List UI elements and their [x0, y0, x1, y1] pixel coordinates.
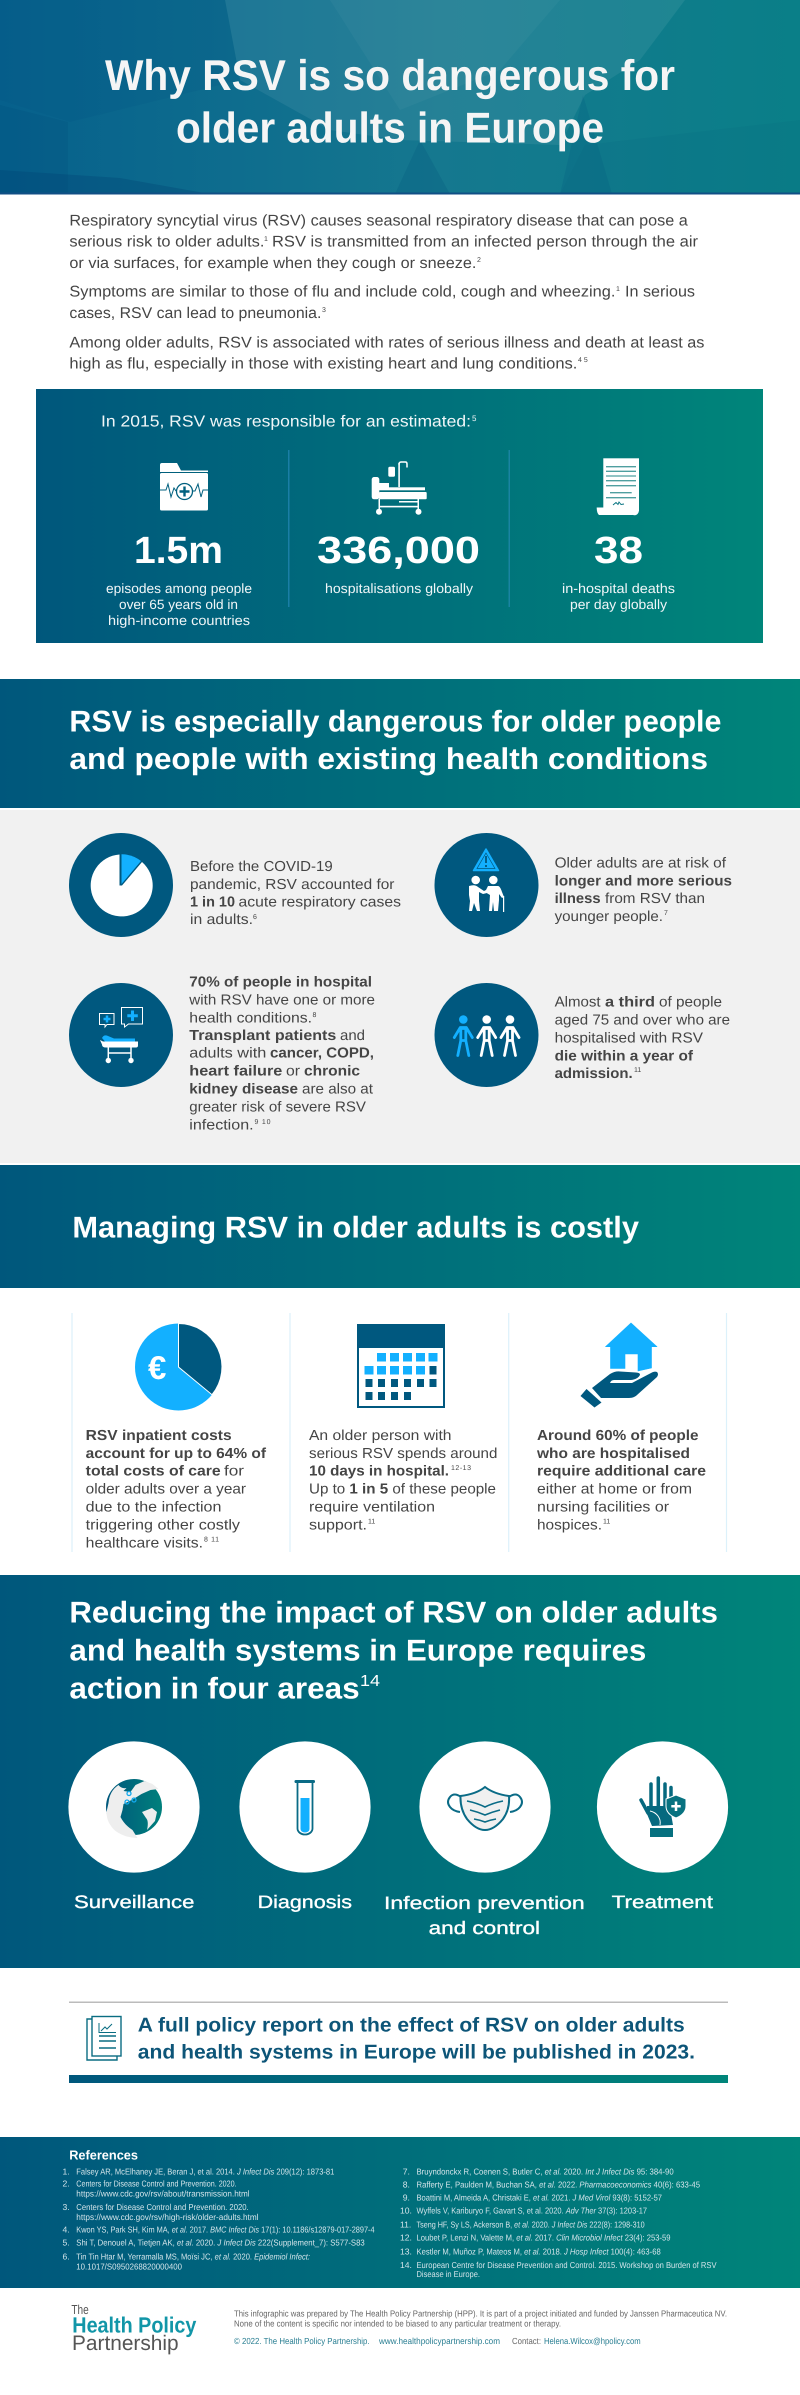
- statistic: 38 deaths: in-hospital deaths: [562, 581, 675, 596]
- text: additional care: nursing facilities or: [537, 1499, 669, 1515]
- fact: existing conditions: cancer, COPD,: [270, 1046, 374, 1062]
- references column one: 3.: [62, 2202, 70, 2212]
- icon: report document: [87, 2016, 121, 2060]
- intro text: serious risk to older adults.: [69, 234, 264, 251]
- action: surveillance label: Surveillance: [74, 1892, 194, 1912]
- references column two: Wyffels V, Kariburyo F, Gavart S, et al. 2020. Adv Ther 37(3): 1203-17: [416, 2206, 647, 2216]
- text: ten days in hospital: [309, 1428, 497, 1533]
- text: inpatient costs: [86, 1428, 266, 1551]
- references column one: Centers for Disease Control and Prevention. 2020.: [76, 2179, 237, 2189]
- fact: die within a year: die within a year of: [555, 1048, 693, 1064]
- fact: existing conditions: kidney disease: [189, 1081, 298, 1097]
- references column two: 7.: [403, 2166, 410, 2176]
- statistic: 38 deaths: 38: [594, 530, 643, 572]
- fact: one in ten: [190, 859, 401, 928]
- statistic: 1.5m episodes: [106, 530, 252, 628]
- references column one: Falsey AR, McElhaney JE, Beran J, et al. 2014. J Infect Dis 209(12): 1873-81: [76, 2166, 334, 2176]
- fact: existing conditions: heart failure: [189, 1064, 282, 1080]
- fact: existing conditions: Transplant patients: [189, 1028, 336, 1044]
- fact: longer illness: [555, 856, 732, 925]
- intro text: RSV is transmitted from an infected person through the air: [272, 234, 698, 251]
- intro text: or via surfaces, for example when they cough or sneeze.: [69, 255, 476, 272]
- icon: hand holding house: [580, 1323, 658, 1408]
- fact: existing conditions: or: [286, 1064, 300, 1080]
- text: additional care: hospices.: [537, 1517, 602, 1533]
- intro text: In serious: [625, 284, 695, 301]
- references column one: 2.: [62, 2179, 70, 2189]
- logo: Health Policy Partnership: [71, 2302, 197, 2355]
- text: additional care: who are hospitalised: [536, 1446, 690, 1462]
- intro text: 4 5: [578, 357, 588, 364]
- references column two: Rafferty E, Paulden M, Buchan SA, et al. 2022. Pharmacoeconomics 40(6): 633-45: [416, 2179, 700, 2189]
- fact: existing conditions: health conditions.: [189, 1010, 312, 1026]
- fact: existing conditions: are also at: [302, 1081, 373, 1097]
- intro text: cases, RSV can lead to pneumonia.: [69, 305, 321, 322]
- references column one: 10.1017/S0950268820000400: [76, 2261, 182, 2271]
- references column one: https://www.cdc.gov/rsv/about/transmission.html: [76, 2189, 250, 2199]
- fact: one in ten: acute respiratory cases: [238, 895, 401, 911]
- title: older adults in Europe: [176, 105, 604, 153]
- text: inpatient costs: older adults over a year: [86, 1482, 246, 1498]
- intro text: 2: [477, 257, 481, 264]
- footer disclosure: www.healthpolicypartnership.com: [378, 2336, 500, 2346]
- references column two: Disease in Europe.: [416, 2269, 480, 2279]
- panel: references: [0, 2137, 800, 2288]
- panel: section heading dangerous: RSV is especially dangerous for older people: [69, 706, 721, 739]
- fact: die within a year: aged 75 and over who are: [555, 1013, 730, 1029]
- panel: four action areas: [0, 1575, 800, 1968]
- text: inpatient costs: account for up to 64% of: [86, 1446, 266, 1462]
- icon: signed document: [597, 458, 639, 515]
- action: infection prevention label: [384, 1893, 585, 1938]
- text: inpatient costs: 8 11: [204, 1536, 219, 1544]
- action: infection prevention: [419, 1741, 551, 1873]
- references column two: 10.: [400, 2206, 412, 2216]
- fact: existing conditions: adults with: [189, 1046, 266, 1062]
- logo: Health Policy Partnership: Partnership: [72, 2332, 179, 2355]
- title: [105, 52, 675, 153]
- fact: die within a year: a third: [605, 995, 655, 1011]
- statistic: 336,000 hospitalisations: [317, 530, 480, 596]
- action: surveillance: [68, 1741, 200, 1873]
- references column one: Tin Tin Htar M, Yerramalla MS, Moïsi JC, et al. 2020. Epidemiol Infect:: [76, 2251, 311, 2261]
- icon: patient on stretcher: [69, 983, 173, 1087]
- text: additional care: Around 60% of people: [537, 1428, 698, 1444]
- text: inpatient costs: due to the infection: [86, 1499, 221, 1515]
- references column two: Kestler M, Muñoz P, Mateos M, et al. 2018. J Hosp Infect 100(4): 463-68: [416, 2246, 661, 2256]
- callout text: A full policy report on the effect of RSV on older adults: [138, 2015, 685, 2037]
- intro text: Among older adults, RSV is associated with rates of serious illness and death at least as: [69, 334, 705, 351]
- fact: existing conditions: chronic: [304, 1064, 360, 1080]
- footer disclosure: This infographic was prepared by The Health Policy Partnership (HPP). It is part of a project initiated and funded by Janssen Pharmaceutica NV.: [234, 2309, 727, 2319]
- text: additional care: [536, 1428, 706, 1533]
- fact: one in ten: 6: [253, 914, 257, 921]
- statistic: 1.5m episodes: high-income countries: [108, 613, 250, 628]
- fact: one in ten: 1 in 10: [190, 895, 235, 911]
- icon: three people: [434, 983, 538, 1087]
- fact: die within a year: of people: [659, 995, 722, 1011]
- fact: die within a year: Almost: [555, 995, 601, 1011]
- text: inpatient costs: triggering other costly: [86, 1517, 241, 1533]
- icon: euro pie chart: [135, 1324, 222, 1410]
- references column two: 14.: [400, 2260, 412, 2270]
- references heading: References: [69, 2147, 138, 2162]
- references column two: Tseng HF, Sy LS, Ackerson B, et al. 2020. J Infect Dis 222(8): 1298-310: [416, 2220, 645, 2230]
- panel: 2015 statistics: 5: [472, 414, 477, 423]
- panel: section heading costly: [0, 1165, 800, 1288]
- text: ten days in hospital: 10 days in hospital.: [309, 1464, 449, 1480]
- text: ten days in hospital: require ventilation: [309, 1499, 435, 1515]
- footer disclosure: Contact:: [512, 2336, 541, 2346]
- fact: longer illness: Older adults are at risk of: [555, 856, 727, 872]
- icon: calendar: [357, 1324, 445, 1407]
- panel: cost columns: [72, 1313, 726, 1552]
- logo: Health Policy Partnership: The: [71, 2302, 89, 2317]
- references column one: 4.: [62, 2225, 70, 2235]
- references column two: 11.: [400, 2220, 411, 2230]
- fact: die within a year: [555, 995, 730, 1082]
- fact: existing conditions: infection.: [189, 1117, 254, 1133]
- logo: Health Policy Partnership: Health Policy: [72, 2313, 197, 2338]
- intro text: 1: [264, 236, 268, 243]
- fact: longer illness: from RSV than: [605, 891, 705, 907]
- references column one: [62, 2166, 375, 2271]
- fact: existing conditions: 9 10: [254, 1119, 271, 1126]
- callout text: and health systems in Europe will be published in 2023.: [138, 2041, 695, 2063]
- title: Why RSV is so dangerous for: [105, 52, 675, 100]
- action: infection prevention label: Infection prevention: [384, 1893, 585, 1913]
- statistic: 1.5m episodes: 1.5m: [134, 530, 223, 572]
- text: additional care: 11: [603, 1518, 610, 1526]
- statistic: 38 deaths: per day globally: [570, 597, 667, 612]
- statistic: 336,000 hospitalisations: 336,000: [317, 530, 480, 572]
- icon: medical folder: [160, 463, 208, 510]
- text: inpatient costs: total costs of care: [86, 1464, 221, 1480]
- text: inpatient costs: RSV inpatient costs: [86, 1428, 232, 1444]
- statistic: 38 deaths: [562, 530, 675, 612]
- references column two: [400, 2166, 717, 2279]
- intro text: Symptoms are similar to those of flu and include cold, cough and wheezing.: [69, 284, 615, 301]
- action: treatment: [597, 1741, 728, 1873]
- text: inpatient costs: for: [224, 1464, 244, 1480]
- text: additional care: either at home or from: [537, 1482, 692, 1498]
- fact: one in ten: Before the COVID-19: [190, 859, 333, 875]
- references column two: 8.: [403, 2179, 410, 2189]
- references column two: 12.: [400, 2233, 412, 2243]
- section heading: action: 14: [360, 1673, 380, 1690]
- text: ten days in hospital: 12-13: [451, 1465, 471, 1472]
- fact: die within a year: admission.: [555, 1066, 633, 1082]
- references column two: 9.: [403, 2193, 410, 2203]
- action: diagnosis: [239, 1741, 371, 1873]
- text: additional care: require additional care: [537, 1464, 706, 1480]
- intro text: Respiratory syncytial virus (RSV) causes seasonal respiratory disease that can pose a: [69, 212, 688, 229]
- text: inpatient costs: healthcare visits.: [86, 1535, 203, 1551]
- action: treatment label: Treatment: [612, 1892, 713, 1912]
- fact: existing conditions: [188, 975, 375, 1133]
- action: infection prevention label: and control: [429, 1918, 540, 1938]
- section heading: action: [69, 1597, 718, 1705]
- section heading: action: and health systems in Europe requires: [69, 1635, 646, 1668]
- icon: pie one in ten: [69, 833, 173, 937]
- fact: existing conditions: 8: [312, 1012, 316, 1019]
- fact: die within a year: hospitalised with RSV: [555, 1030, 703, 1046]
- fact: one in ten: in adults.: [190, 912, 253, 928]
- fact: existing conditions: with RSV have one or more: [188, 992, 375, 1008]
- panel: risk facts: [0, 810, 800, 1163]
- fact: existing conditions: and: [340, 1028, 365, 1044]
- references column two: Loubet P, Lenzi N, Valette M, et al. 2017. Clin Microbiol Infect 23(4): 253-59: [416, 2233, 671, 2243]
- intro text: 1: [616, 286, 620, 293]
- fact: longer illness: longer and more serious: [555, 874, 732, 890]
- fact: existing conditions: 70% of people in hospital: [189, 975, 372, 991]
- references column two: Boattini M, Almeida A, Christaki E, et al. 2021. J Med Virol 93(8): 5152-57: [416, 2193, 662, 2203]
- footer disclosure: Helena.Wilcox@hpolicy.com: [544, 2336, 641, 2346]
- intro text: 3: [322, 307, 326, 314]
- intro text: [69, 212, 705, 372]
- fact: longer illness: 7: [664, 910, 668, 917]
- fact: longer illness: younger people.: [555, 909, 663, 925]
- statistic: 1.5m episodes: episodes among people: [106, 581, 252, 596]
- intro text: high as flu, especially in those with existing heart and lung conditions.: [69, 355, 577, 372]
- footer disclosure: © 2022. The Health Policy Partnership.: [234, 2336, 370, 2346]
- references column one: Shi T, Denouel A, Tietjen AK, et al. 2020. J Infect Dis 222(Supplement_7): S577-S83: [76, 2238, 365, 2248]
- panel: section heading dangerous: [0, 679, 800, 808]
- references column one: 5.: [62, 2238, 70, 2248]
- references column two: European Centre for Disease Prevention and Control. 2015. Workshop on Burden of RSV: [416, 2260, 717, 2270]
- panel: header banner: [0, 0, 800, 194]
- references column two: Bruyndonckx R, Coenen S, Butler C, et al. 2020. Int J Infect Dis 95: 384-90: [416, 2166, 674, 2176]
- panel: section heading costly: Managing RSV in older adults is costly: [72, 1212, 639, 1245]
- icon: older adults warning: [434, 833, 538, 937]
- text: ten days in hospital: support.: [309, 1517, 367, 1533]
- references column one: Centers for Disease Control and Prevention. 2020.: [76, 2202, 249, 2212]
- statistic: 1.5m episodes: over 65 years old in: [119, 597, 238, 612]
- text: ten days in hospital: serious RSV spends around: [309, 1446, 497, 1462]
- fact: die within a year: 11: [634, 1067, 641, 1074]
- references column one: 1.: [62, 2166, 70, 2176]
- statistic: 336,000 hospitalisations: hospitalisations globally: [325, 581, 473, 596]
- icon: euro pie chart: €: [148, 1349, 166, 1386]
- action: diagnosis label: Diagnosis: [258, 1892, 352, 1912]
- fact: existing conditions: greater risk of severe RSV: [189, 1100, 366, 1116]
- text: ten days in hospital: 11: [368, 1518, 375, 1526]
- footer disclosure: [234, 2309, 727, 2346]
- callout text: [138, 2015, 695, 2063]
- section heading: action: action in four areas: [69, 1672, 360, 1705]
- references column one: 6.: [62, 2251, 70, 2261]
- text: ten days in hospital: An older person with: [309, 1428, 452, 1444]
- references column one: https://www.cdc.gov/rsv/high-risk/older-adults.html: [76, 2212, 259, 2222]
- panel: 2015 statistics: [36, 389, 763, 643]
- panel: section heading dangerous: and people with existing health conditions: [69, 743, 708, 776]
- text: ten days in hospital: Up to 1 in 5 of these people: [309, 1482, 496, 1498]
- icon: hospital bed: [372, 462, 427, 515]
- section heading: action: Reducing the impact of RSV on older adults: [69, 1597, 718, 1630]
- statistics intro: In 2015, RSV was responsible for an estimated:: [101, 414, 471, 431]
- references column one: Kwon YS, Park SH, Kim MA, et al. 2017. BMC Infect Dis 17(1): 10.1186/s12879-017-2897-4: [76, 2225, 375, 2235]
- fact: one in ten: pandemic, RSV accounted for: [190, 877, 395, 893]
- references column two: 13.: [400, 2246, 412, 2256]
- footer disclosure: None of the content is specific nor intended to be biased to any particular treatment or therapy.: [234, 2319, 561, 2329]
- fact: longer illness: illness: [555, 891, 601, 907]
- callout: policy report: [69, 2002, 728, 2083]
